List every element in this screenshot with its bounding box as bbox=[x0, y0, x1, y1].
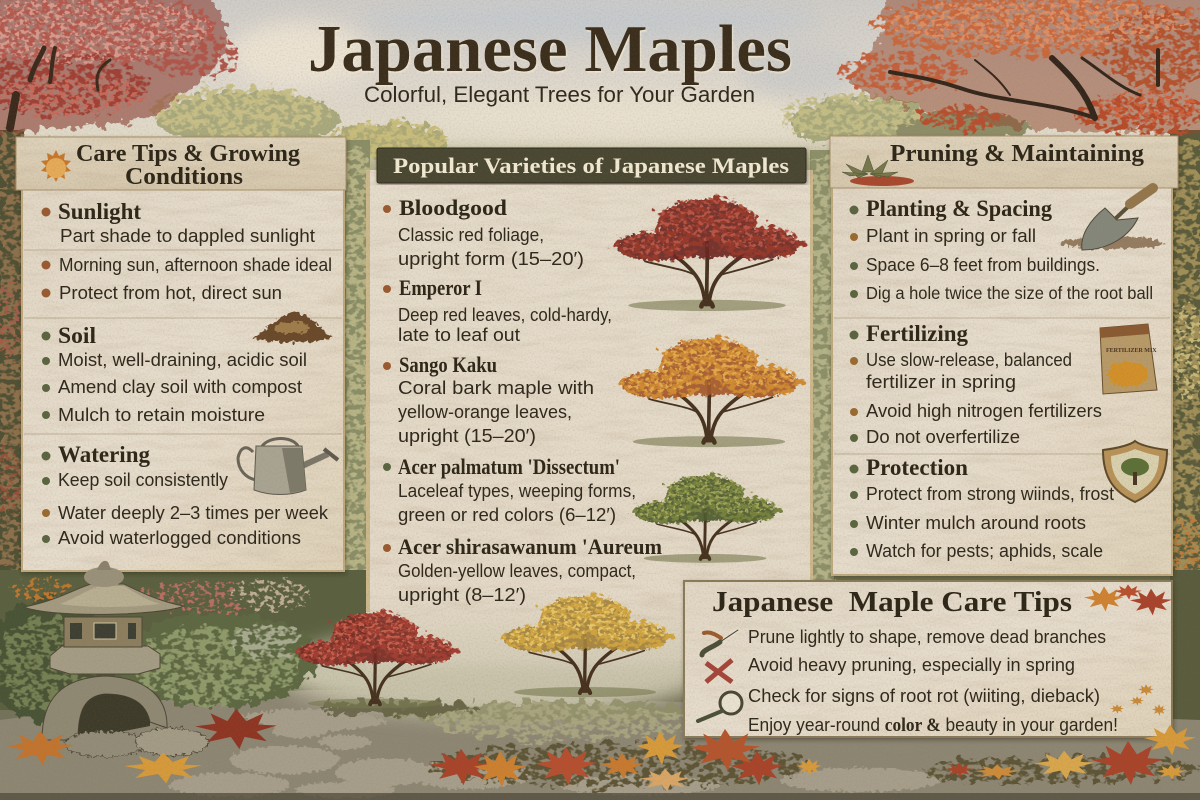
variety: bloodgood bbox=[383, 195, 803, 311]
section: protection bbox=[850, 441, 1167, 561]
section: protection: Protection bbox=[866, 455, 968, 480]
section: planting and spacing: Space 6–8 feet from buildings. bbox=[866, 254, 1100, 275]
title: Japanese Maples bbox=[308, 12, 792, 86]
subtitle: Colorful, Elegant Trees for Your Garden bbox=[364, 82, 755, 107]
variety: emperor I: late to leaf out bbox=[398, 324, 520, 345]
panel: care tips and growing conditions bbox=[41, 141, 338, 548]
icon: pruning shears bbox=[702, 630, 738, 655]
panel: pruning and maintaining bbox=[842, 141, 1167, 561]
variety: dissectum: Acer palmatum 'Dissectum' bbox=[398, 454, 620, 479]
section: watering bbox=[42, 438, 338, 548]
section: watering: Avoid waterlogged conditions bbox=[58, 527, 301, 548]
tip: prune: Prune lightly to shape, remove dead branches bbox=[748, 626, 1106, 647]
heading bbox=[76, 141, 300, 190]
section: planting and spacing: Dig a hole twice the size of the root ball bbox=[866, 283, 1153, 303]
section: fertilizing: Use slow-release, balanced bbox=[866, 349, 1072, 370]
tree: top-left red maple bbox=[0, 0, 240, 135]
heading: Pruning & Maintaining bbox=[890, 141, 1144, 167]
shrubs behind the lantern bbox=[0, 577, 315, 722]
variety: sango kaku: upright (15–20′) bbox=[398, 425, 536, 446]
panel: popular varieties bbox=[295, 148, 806, 708]
icon: fertilizer bag: FERTILIZER MIX bbox=[1106, 348, 1157, 354]
tree: dissectum bbox=[632, 474, 779, 563]
variety: aureum: Golden-yellow leaves, compact, bbox=[398, 560, 636, 581]
section: protection: Protect from strong wiinds, frost bbox=[866, 483, 1114, 504]
heading: Conditions bbox=[125, 164, 243, 190]
heading banner bbox=[377, 148, 806, 183]
variety: bloodgood: Classic red foliage, bbox=[398, 224, 544, 245]
tree: golden maple foreground bbox=[500, 594, 671, 697]
section: planting and spacing: Plant in spring or fall bbox=[866, 225, 1036, 246]
heading banner: Popular Varieties of Japanese Maples bbox=[393, 153, 789, 178]
section: sunlight bbox=[42, 199, 332, 303]
section: soil: Mulch to retain moisture bbox=[58, 404, 265, 425]
side hedges bbox=[0, 130, 1200, 600]
tree: red maple foreground bbox=[295, 611, 457, 708]
section: fertilizing bbox=[850, 321, 1157, 447]
section: fertilizing: Fertilizing bbox=[866, 321, 968, 346]
icon: fertilizer bag bbox=[1100, 324, 1157, 394]
stone lantern bbox=[24, 561, 208, 757]
icon: maple sprig bbox=[842, 155, 914, 186]
section: soil: Amend clay soil with compost bbox=[58, 376, 302, 397]
section: watering: Watering bbox=[58, 442, 150, 467]
variety: aureum bbox=[383, 534, 662, 605]
icon: magnifying glass bbox=[698, 692, 742, 721]
section: sunlight: Protect from hot, direct sun bbox=[59, 282, 282, 303]
variety: emperor I: Emperor I bbox=[399, 275, 482, 300]
section: watering: Water deeply 2–3 times per week bbox=[58, 502, 329, 523]
section: sunlight: Sunlight bbox=[58, 199, 141, 224]
section: planting and spacing bbox=[850, 188, 1164, 303]
tip: check roots bbox=[698, 685, 1100, 721]
fallen maple leaves bbox=[6, 584, 1200, 792]
icon: watering can bbox=[238, 438, 338, 494]
tip: avoid heavy pruning bbox=[706, 654, 1075, 682]
variety: aureum: upright (8–12′) bbox=[398, 584, 526, 605]
care tips card bbox=[684, 581, 1172, 737]
section: sunlight: Morning sun, afternoon shade ideal bbox=[59, 254, 332, 275]
ground and stone path bbox=[0, 570, 1200, 800]
section: fertilizing: Avoid high nitrogen fertilizers bbox=[866, 400, 1102, 421]
section: protection: Watch for pests; aphids, scale bbox=[866, 540, 1103, 561]
distant foliage bbox=[150, 86, 1030, 160]
heading: Japanese Maple Care Tips bbox=[712, 587, 1072, 618]
variety: bloodgood: upright form (15–20′) bbox=[398, 248, 584, 269]
variety: sango kaku: Sango Kaku bbox=[399, 352, 497, 377]
midground grass bbox=[320, 701, 700, 740]
section: soil: Moist, well-draining, acidic soil bbox=[58, 349, 307, 370]
tree: sango kaku bbox=[618, 336, 802, 447]
tree: bloodgood bbox=[613, 197, 803, 311]
section: sunlight: Part shade to dappled sunlight bbox=[60, 225, 315, 246]
section: planting and spacing: Planting & Spacing bbox=[866, 196, 1052, 221]
variety: sango kaku bbox=[383, 336, 802, 447]
tip: enjoy: Enjoy year-round color & beauty in your garden! bbox=[748, 714, 1118, 736]
tip: prune bbox=[702, 626, 1106, 655]
variety: emperor I bbox=[383, 275, 612, 345]
variety: dissectum: green or red colors (6–12′) bbox=[398, 504, 616, 525]
tree: top-right red maple bbox=[835, 0, 1200, 135]
section: soil: Soil bbox=[58, 323, 96, 348]
variety: sango kaku: yellow-orange leaves, bbox=[398, 401, 572, 422]
tip: check roots: Check for signs of root rot (wiiting, dieback) bbox=[748, 685, 1100, 706]
tip: avoid heavy pruning: Avoid heavy pruning, especially in spring bbox=[748, 654, 1075, 675]
heading: Care Tips & Growing bbox=[76, 141, 300, 167]
section: fertilizing: Do not overfertilize bbox=[866, 426, 1020, 447]
panel: japanese maple care tips bbox=[698, 587, 1118, 736]
icon: red cross bbox=[706, 660, 732, 682]
leaf litter bbox=[430, 743, 1200, 787]
variety: aureum: Acer shirasawanum 'Aureum bbox=[398, 534, 662, 559]
variety: bloodgood: Bloodgood bbox=[399, 195, 507, 220]
section: protection: Winter mulch around roots bbox=[866, 512, 1086, 533]
section: fertilizing: fertilizer in spring bbox=[866, 371, 1016, 392]
icon: sun bbox=[41, 150, 71, 182]
variety: dissectum: Laceleaf types, weeping forms, bbox=[398, 480, 636, 501]
section: watering: Keep soil consistently bbox=[58, 469, 229, 490]
variety: dissectum bbox=[383, 454, 779, 563]
card grain bbox=[684, 581, 1172, 737]
variety: sango kaku: Coral bark maple with bbox=[398, 377, 594, 398]
section: soil bbox=[42, 312, 334, 425]
variety: emperor I: Deep red leaves, cold-hardy, bbox=[398, 304, 612, 325]
icon: shield with tree bbox=[1103, 441, 1167, 502]
icon: mulch pile bbox=[252, 312, 334, 342]
panel backgrounds bbox=[14, 134, 1182, 692]
icon: trowel bbox=[1060, 188, 1164, 250]
